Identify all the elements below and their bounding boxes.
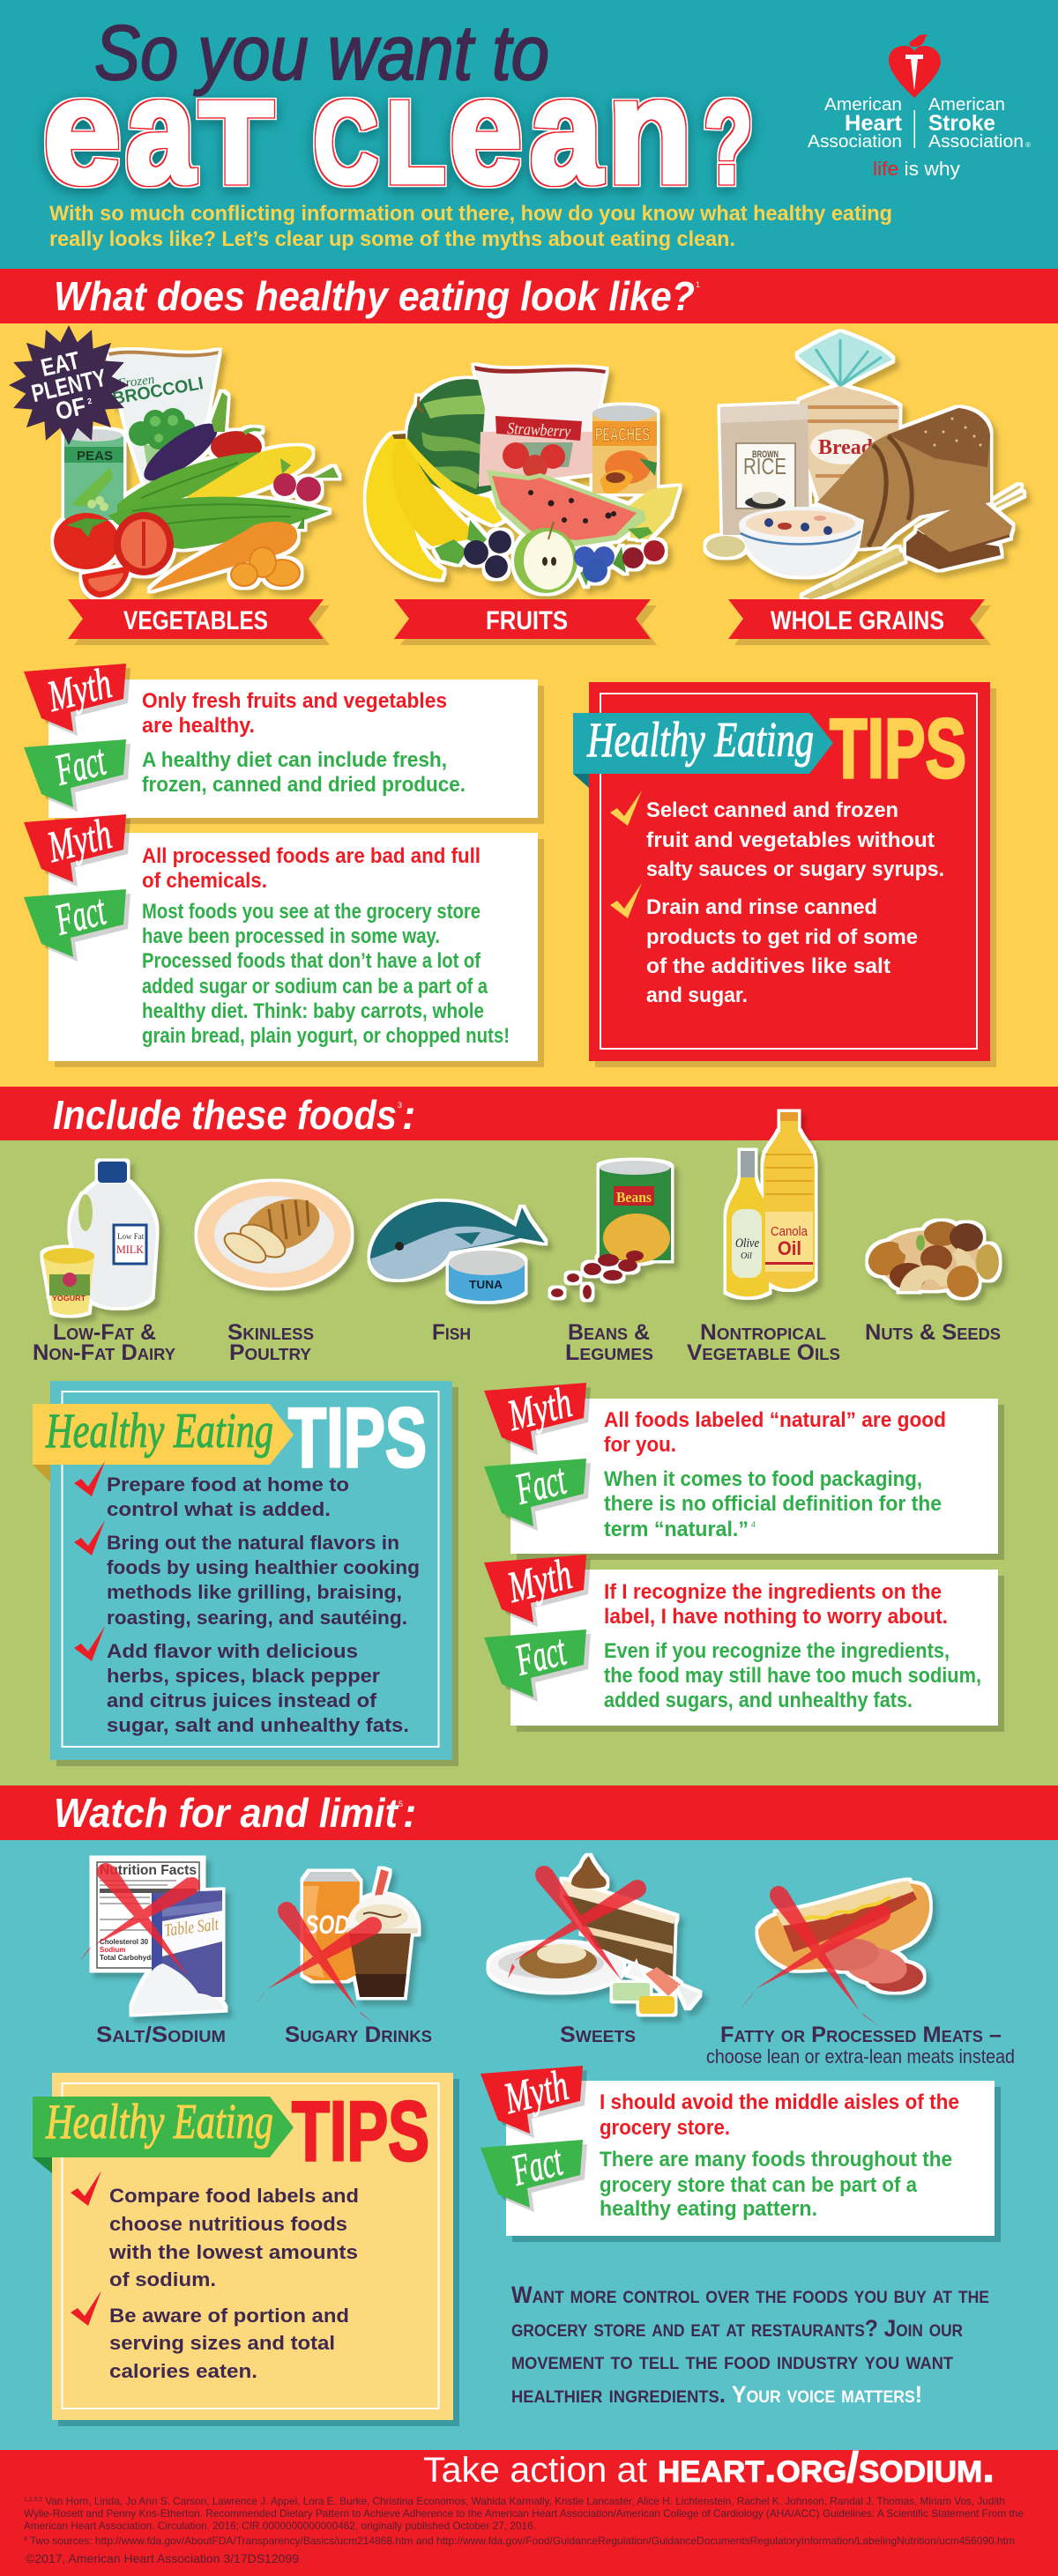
myth text	[604, 1580, 948, 1629]
fact badge: Fact	[49, 885, 111, 945]
tip 1	[71, 2171, 359, 2290]
title: eat clean?: C	[314, 78, 377, 207]
tip 2: calories eaten.	[109, 2360, 257, 2382]
section band: watch for and limit: 5	[399, 1800, 403, 1808]
logo: American Heart Association / American Stroke Association: Association	[808, 132, 902, 152]
call to action text: grocery store and eat at restaurants? Join our	[511, 2315, 963, 2342]
fact text: the food may still have too much sodium,	[604, 1664, 981, 1688]
myth badge	[24, 808, 130, 887]
illustration: sugary drinks	[254, 1869, 418, 2024]
section band: include these foods: Include these foods	[53, 1092, 397, 1138]
fact text: added sugars, and unhealthy fats.	[604, 1689, 913, 1712]
badge: eat plenty of: 2	[86, 397, 93, 406]
tip 1: of sodium.	[109, 2268, 216, 2290]
section band: what does healthy eating look like: 1	[696, 280, 700, 289]
illustration: dairy: MILK	[116, 1243, 145, 1256]
myth text	[600, 2090, 959, 2140]
ribbon: whole grains	[728, 599, 991, 645]
badge: eat plenty of	[9, 325, 129, 445]
fact text: there is no official definition for the	[604, 1492, 942, 1516]
fact badge	[481, 2135, 587, 2212]
call to action text	[511, 2282, 989, 2408]
myth badge	[481, 2060, 587, 2138]
food labels: watch for and limit: Salt/Sodium	[96, 2023, 226, 2047]
references: 4	[24, 2536, 27, 2543]
ribbon: healthy eating	[33, 2095, 294, 2173]
food labels: include these foods: Nontropical	[700, 1320, 826, 1345]
myth text	[142, 689, 447, 738]
intro text: really looks like? Let’s clear up some of the myths about eating clean.	[49, 227, 735, 251]
fact badge: Fact	[49, 735, 111, 795]
myth badge	[484, 1377, 591, 1455]
logo: American Heart Association / American Stroke Association: American	[928, 95, 1005, 115]
illustration: sugary drinks: SOD	[305, 1911, 349, 1940]
illustration: fruits	[366, 366, 679, 593]
tip 3: and citrus juices instead of	[107, 1689, 377, 1711]
fact text: healthy eating pattern.	[600, 2197, 817, 2221]
illustration: vegetables: PEAS	[77, 449, 113, 464]
tip 1: Prepare food at home to	[107, 1474, 349, 1496]
badge: eat plenty of: OF	[53, 392, 88, 426]
fact text	[142, 900, 510, 1048]
section band: what does healthy eating look like	[0, 269, 1058, 323]
panel: healthy eating tips 1	[573, 682, 996, 1067]
illustration: vegetable oils	[726, 1112, 815, 1297]
illustration: fruits: Strawberry	[507, 419, 571, 442]
ribbon: whole grains: WHOLE GRAINS	[771, 606, 944, 635]
fact text	[604, 1467, 942, 1541]
ribbon: fruits	[394, 599, 657, 645]
logo: American Heart Association / American Stroke Association: Association	[928, 132, 1024, 152]
title: eat clean?: e	[450, 48, 522, 215]
take action line: Take action at	[423, 2451, 647, 2490]
call to action text: Your voice matters!	[732, 2381, 922, 2408]
fact text	[142, 748, 466, 797]
myth text: for you.	[604, 1433, 676, 1457]
tip 2: roasting, searing, and sautéing.	[107, 1607, 407, 1629]
myth badge: Myth	[42, 808, 116, 872]
tip 1: Select canned and frozen	[646, 798, 898, 822]
food labels: include these foods	[33, 1320, 1001, 1365]
food labels: watch for and limit	[96, 2023, 1015, 2067]
tip 1	[74, 1461, 349, 1520]
illustration: vegetable oils: Oil	[741, 1251, 752, 1261]
fact badge	[24, 735, 130, 812]
illustration: whole grains: Bread	[818, 436, 874, 459]
take action line: heart.org/sodium.	[658, 2445, 995, 2491]
illustration: salt and sodium: Table Salt	[163, 1915, 220, 1941]
myth text: of chemicals.	[142, 869, 267, 893]
section band: include these foods: 3	[398, 1101, 402, 1110]
illustration: vegetables: Frozen	[116, 373, 155, 391]
references: American Heart Association. Circulation. 2016; CIR.0000000000000462, originally published October 27, 2016.	[24, 2520, 536, 2532]
myth badge: Myth	[42, 657, 116, 721]
illustration: salt and sodium: Total Carbohydrate	[100, 1954, 164, 1962]
myth badge: Myth	[503, 1377, 577, 1440]
tip 2	[610, 883, 918, 1007]
fact text: term “natural.”	[604, 1518, 749, 1541]
intro text: With so much conflicting information out there, how do you know what healthy eating	[49, 202, 892, 226]
fact badge: Fact	[510, 1454, 571, 1514]
myth text: label, I have nothing to worry about.	[604, 1605, 948, 1629]
title: eat clean?: a	[126, 48, 196, 215]
illustration: beans and legumes: Beans	[616, 1189, 652, 1206]
illustration: dairy: YOGURT	[52, 1295, 86, 1303]
fact badge: Fact	[510, 1625, 571, 1685]
myth text: All processed foods are bad and full	[142, 844, 481, 868]
food labels: include these foods: Nuts & Seeds	[865, 1320, 1001, 1345]
references: Two sources: http://www.fda.gov/AboutFDA/Transparency/Basics/ucm214868.htm and http://www.fda.gov/Food/GuidanceRegulation/GuidanceDocumentsRegulatoryInformation/LabelingNutrition/ucm456090.htm	[27, 2535, 1015, 2547]
tip 2: Drain and rinse canned	[646, 895, 877, 919]
tip 2: Be aware of portion and	[109, 2305, 349, 2327]
fact text: There are many foods throughout the	[600, 2148, 952, 2171]
panel: myth and fact 2	[24, 808, 544, 1067]
title: eat clean?: L	[386, 78, 445, 207]
ribbon: vegetables: VEGETABLES	[123, 606, 268, 635]
ribbon: healthy eating	[33, 1404, 294, 1482]
tip 2: of the additives like salt	[646, 954, 890, 978]
references: Wylie-Rosett and Penny Kris-Etherton. Recommended Dietary Pattern to Achieve Adherence to the American Heart Association/American College of Cardiology (AHA/ACC) Guidelines: A Scientific Statement From the	[24, 2507, 1024, 2520]
heading: tips: TIPS	[292, 2084, 429, 2179]
references	[24, 2495, 1024, 2565]
intro text	[49, 202, 892, 251]
fact badge	[484, 1625, 591, 1702]
tip 1: Compare food labels and	[109, 2185, 359, 2207]
myth badge: Myth	[503, 1548, 577, 1612]
fact text: grocery store that can be part of a	[600, 2173, 918, 2197]
tip 2: and sugar.	[646, 984, 748, 1007]
myth text: grocery store.	[600, 2116, 730, 2140]
food labels: include these foods: Poultry	[229, 1340, 311, 1365]
fact text: frozen, canned and dried produce.	[142, 773, 466, 797]
section band: watch for and limit: Watch for and limit	[54, 1790, 399, 1836]
heading: tips: TIPS	[288, 1391, 427, 1485]
tip 2: products to get rid of some	[646, 925, 918, 949]
illustration: skinless poultry	[197, 1182, 351, 1288]
food labels: watch for and limit: Fatty or Processed Meats –	[720, 2023, 1002, 2047]
myth badge	[24, 657, 130, 736]
tip 1	[610, 791, 944, 881]
call to action text: healthier ingredients.	[511, 2381, 726, 2408]
fact badge	[24, 885, 130, 961]
panel: myth and fact 4	[484, 1548, 1004, 1732]
fact text: Most foods you see at the grocery store	[142, 900, 481, 924]
illustration: vegetables: BROCCOLI	[111, 374, 205, 409]
illustration: vegetable oils: Oil	[778, 1237, 801, 1259]
red x	[508, 1866, 646, 1980]
myth badge: Myth	[499, 2060, 573, 2123]
section band: what does healthy eating look like: What does healthy eating look like?	[54, 273, 695, 319]
red x	[79, 1863, 200, 1976]
section band: watch for and limit	[0, 1785, 1058, 1840]
tip 2: serving sizes and total	[109, 2332, 335, 2354]
fact text: Processed foods that don’t have a lot of	[142, 949, 481, 973]
call to action text: movement to tell the food industry you want	[511, 2348, 953, 2374]
logo: American Heart Association / American Stroke Association: American	[824, 95, 902, 115]
red x	[254, 1902, 382, 2024]
myth text	[142, 844, 481, 893]
fact badge	[484, 1454, 591, 1531]
fact text: A healthy diet can include fresh,	[142, 748, 447, 772]
title: eat clean?: ?	[704, 78, 752, 207]
food labels: include these foods: Beans &	[568, 1320, 650, 1345]
food labels: include these foods: Legumes	[565, 1340, 653, 1365]
panel: myth and fact 5	[481, 2060, 1001, 2242]
title: eat clean?: a	[530, 48, 603, 215]
fact text	[600, 2148, 952, 2221]
myth text: are healthy.	[142, 714, 255, 738]
title: eat clean?: e	[43, 48, 121, 215]
ribbon: healthy eating: Healthy Eating	[586, 713, 814, 768]
illustration: salt and sodium: Sodium	[100, 1946, 125, 1954]
tip 3	[74, 1626, 409, 1736]
fact text: 4	[751, 1520, 756, 1529]
section band: include these foods	[0, 1087, 1058, 1140]
fact text: When it comes to food packaging,	[604, 1467, 922, 1491]
illustration: fruits: PEACHES	[595, 425, 650, 445]
call to action text: Want more control over the foods you buy at the	[511, 2282, 989, 2308]
food labels: watch for and limit: choose lean or extra-lean meats instead	[706, 2045, 1015, 2067]
logo: American Heart Association / American Stroke Association	[808, 34, 1031, 180]
illustration: whole grains	[706, 332, 1023, 599]
ribbon: healthy eating	[573, 713, 833, 788]
food labels: watch for and limit: Sweets	[560, 2023, 636, 2047]
fact text: have been processed in some way.	[142, 924, 440, 948]
illustration: nuts and seeds	[862, 1221, 999, 1297]
fact text: added sugar or sodium can be a part of a	[142, 975, 488, 998]
title: eat clean?: T	[199, 78, 273, 207]
fact text	[604, 1639, 981, 1712]
illustration: vegetables	[54, 351, 339, 598]
section band: include these foods: :	[402, 1092, 415, 1138]
logo: American Heart Association / American Stroke Association: Heart	[845, 111, 903, 136]
illustration: whole grains: RICE	[743, 453, 786, 479]
title: eat clean?	[43, 48, 752, 215]
references: 1,2,3,5	[24, 2497, 42, 2503]
red x	[741, 1886, 890, 2027]
myth text: Only fresh fruits and vegetables	[142, 689, 447, 713]
illustration: dairy	[43, 1162, 156, 1315]
tip 3: herbs, spices, black pepper	[107, 1665, 380, 1687]
tip 1: with the lowest amounts	[108, 2241, 358, 2263]
tip 2: Bring out the natural flavors in	[107, 1532, 399, 1554]
tip 2	[74, 1520, 420, 1629]
illustration: fish	[370, 1202, 545, 1301]
myth text	[604, 1408, 946, 1457]
logo: American Heart Association / American Stroke Association: ®	[1025, 141, 1031, 149]
tip 2: methods like grilling, braising,	[107, 1581, 402, 1603]
fact text: healthy diet. Think: baby carrots, whole	[142, 999, 484, 1023]
badge: eat plenty of: PLENTY	[29, 364, 109, 407]
food labels: include these foods: Non-Fat Dairy	[33, 1340, 175, 1365]
tip 2: foods by using healthier cooking	[107, 1556, 420, 1578]
tip 1: salty sauces or sugary syrups.	[646, 857, 944, 881]
references: ©2017, American Heart Association 3/17DS12099	[26, 2551, 299, 2565]
ribbon: vegetables	[68, 599, 330, 645]
logo: American Heart Association / American Stroke Association: Stroke	[928, 111, 995, 136]
ribbon: fruits: FRUITS	[486, 606, 568, 635]
food labels: include these foods: Vegetable Oils	[687, 1340, 840, 1365]
myth text: I should avoid the middle aisles of the	[600, 2090, 959, 2114]
heading: tips: TIPS	[830, 702, 966, 796]
ribbon: healthy eating: Healthy Eating	[45, 1404, 273, 1459]
illustration: salt and sodium: Nutrition Facts	[100, 1863, 197, 1878]
fact text: grain bread, plain yogurt, or chopped nuts!	[142, 1024, 510, 1048]
fact badge: Fact	[506, 2135, 568, 2195]
fact text: Even if you recognize the ingredients,	[604, 1639, 950, 1663]
illustration: dairy: Low Fat	[117, 1232, 145, 1241]
tip 2	[71, 2290, 349, 2382]
tip 1: control what is added.	[107, 1498, 331, 1520]
illustration: sweets	[489, 1856, 699, 2014]
tip 1: fruit and vegetables without	[646, 828, 935, 852]
footer	[0, 2445, 1058, 2576]
section band: watch for and limit: :	[403, 1790, 416, 1836]
food labels: include these foods: Fish	[432, 1320, 471, 1345]
panel: myth and fact 3	[484, 1377, 1004, 1560]
title: eat clean?: n	[607, 48, 692, 215]
food labels: watch for and limit: Sugary Drinks	[285, 2023, 432, 2047]
badge: eat plenty of: EAT	[38, 346, 82, 382]
references: Van Horn, Linda, Jo Ann S. Carson, Lawrence J. Appel, Lora E. Burke, Christina Economos, Wahida Karmally, Kristie Lancaster, Alice H. Lichtenstein, Rachel K. Johnson, Randal J. Thomas, Miriam Vos, Judith	[42, 2495, 1005, 2507]
tip 3: Add flavor with delicious	[107, 1640, 358, 1662]
illustration: beans and legumes	[551, 1161, 671, 1299]
illustration: fatty or processed meats	[741, 1881, 929, 2027]
tip 1: choose nutritious foods	[109, 2213, 347, 2235]
panel: myth and fact 1	[24, 657, 544, 824]
illustration: whole grains: BROWN	[752, 449, 779, 460]
tip 3: sugar, salt and unhealthy fats.	[107, 1714, 409, 1736]
illustration: salt and sodium: Cholesterol 30	[100, 1938, 149, 1946]
illustration: vegetable oils: Canola	[771, 1224, 808, 1239]
icon: heart and torch	[889, 34, 941, 98]
myth text: All foods labeled “natural” are good	[604, 1408, 946, 1432]
title: so you want to: So you want to	[94, 9, 549, 96]
food labels: include these foods: Low-Fat &	[53, 1320, 156, 1345]
tagline: life is why: life is why	[873, 158, 960, 180]
ribbon: healthy eating: Healthy Eating	[45, 2095, 273, 2149]
illustration: fish: TUNA	[469, 1278, 503, 1291]
illustration: salt and sodium	[79, 1859, 225, 2014]
illustration: vegetable oils: Olive	[735, 1236, 759, 1251]
panel: healthy eating tips 2	[33, 1381, 458, 1766]
myth text: If I recognize the ingredients on the	[604, 1580, 942, 1604]
food labels: include these foods: Skinless	[227, 1320, 314, 1345]
myth badge	[484, 1548, 591, 1627]
take action line	[423, 2445, 995, 2491]
panel: healthy eating tips 3	[33, 2073, 459, 2426]
